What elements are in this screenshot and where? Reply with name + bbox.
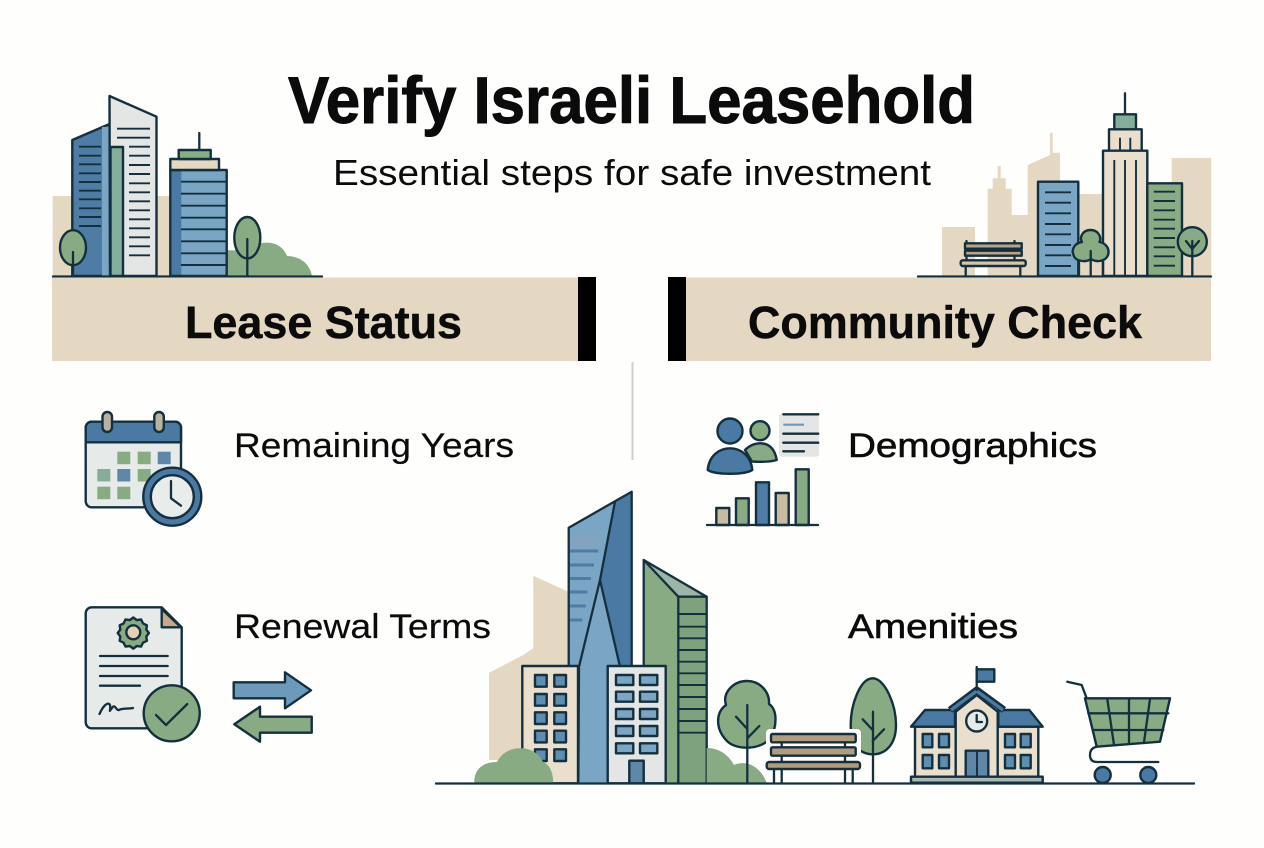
- bar chart: [707, 469, 818, 525]
- icon: school building: [911, 667, 1043, 783]
- heading: Lease Status: Lease Status: [185, 297, 462, 348]
- arrow: back: [234, 707, 312, 742]
- label: Amenities: Amenities: [848, 608, 1018, 646]
- panel header: Lease Status: [52, 277, 596, 361]
- arrow: forward: [234, 672, 311, 708]
- panel: left skyline illustration: [53, 96, 322, 277]
- icon: shopping cart: [1067, 682, 1170, 783]
- label: Remaining Years: Remaining Years: [234, 427, 514, 465]
- panel: right skyline illustration: [918, 93, 1211, 277]
- title: Verify Israeli Leasehold: [288, 63, 975, 137]
- subtitle: Essential steps for safe investment: [333, 152, 931, 193]
- icon: calendar with clock: [86, 412, 201, 526]
- icon: lease document with seal and check: [86, 607, 200, 741]
- icon: tall tree: [851, 678, 896, 783]
- icon: park bench: [766, 729, 861, 783]
- icon: demographics people and bar chart: [707, 413, 819, 525]
- heading: Community Check: Community Check: [748, 297, 1143, 348]
- icon: renewal exchange arrows: [234, 672, 312, 742]
- illustration: central towers: [474, 492, 767, 783]
- icon: round tree: [718, 681, 776, 783]
- label: Renewal Terms: Renewal Terms: [234, 608, 491, 646]
- label: Demographics: Demographics: [848, 427, 1097, 465]
- panel header: Community Check: [668, 277, 1211, 361]
